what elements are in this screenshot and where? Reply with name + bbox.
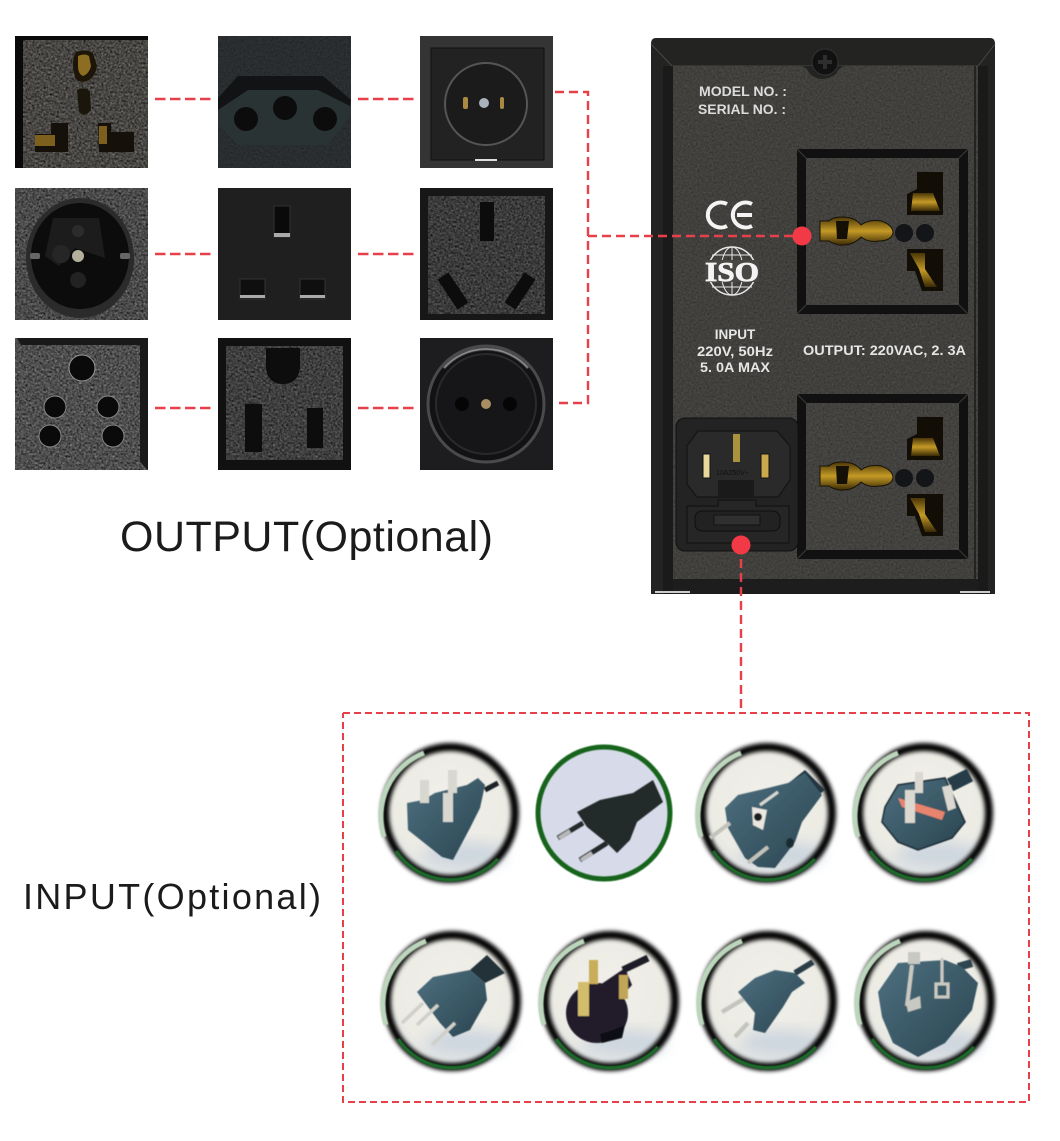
- label: input rating: [697, 327, 773, 375]
- socket tile: Chinese/Australian: [420, 188, 553, 320]
- output socket: upper: [797, 149, 968, 314]
- label: input rating: 5. 0A MAX: [700, 360, 770, 375]
- output socket: lower: [797, 394, 968, 559]
- plug badge: Schuko: [698, 747, 832, 880]
- label: output rating: OUTPUT: 220VAC, 2. 3A: [803, 343, 966, 358]
- socket tile: French wall plate: [420, 36, 553, 168]
- heading: input optional: INPUT(Optional): [23, 876, 321, 917]
- panel: device rear: [651, 38, 995, 594]
- socket tile: universal: [15, 36, 148, 168]
- icon: screw: [800, 49, 846, 79]
- connector: dashed line to input box: [740, 545, 742, 713]
- plug badge: Indian round: [541, 935, 675, 1068]
- socket tile: American: [218, 338, 351, 470]
- input inlet with fuse drawer: 10A250V~: [716, 470, 749, 477]
- plug badge: US angled: [381, 747, 515, 880]
- marker: input dot: [732, 536, 750, 554]
- connector: dashed links between socket tiles: [155, 99, 414, 408]
- label: input rating: 220V, 50Hz: [697, 344, 773, 359]
- icon: CE mark: [708, 203, 752, 228]
- connector: dashed bracket to output socket: [555, 92, 802, 403]
- label: input rating: INPUT: [715, 327, 756, 342]
- label: model and serial: MODEL NO. :: [699, 84, 787, 99]
- panel: output socket options: [15, 36, 553, 470]
- label: model and serial: [698, 84, 787, 117]
- plug badge: British: [855, 747, 989, 880]
- socket tile: Indian five-pin: [15, 338, 148, 470]
- plug badge: Australian angled: [857, 935, 991, 1068]
- input inlet with fuse drawer: [676, 418, 798, 551]
- socket tile: British: [218, 188, 351, 320]
- panel: input plug options: [381, 747, 991, 1068]
- panel outline: input options box: [343, 713, 1029, 1102]
- socket tile: French round: [420, 338, 553, 470]
- label: model and serial: SERIAL NO. :: [698, 102, 786, 117]
- socket tile: Brazil style: [218, 36, 351, 168]
- socket tile: Schuko: [15, 188, 148, 320]
- icon: ISO mark: [705, 247, 759, 295]
- plug badge: Swiss: [383, 935, 517, 1068]
- icon: ISO mark: ISO: [705, 257, 759, 287]
- marker: output dot: [792, 226, 812, 246]
- heading: output optional: OUTPUT(Optional): [120, 513, 493, 561]
- plug badge: Europlug: [538, 747, 670, 879]
- plug badge: US grounded: [699, 935, 833, 1068]
